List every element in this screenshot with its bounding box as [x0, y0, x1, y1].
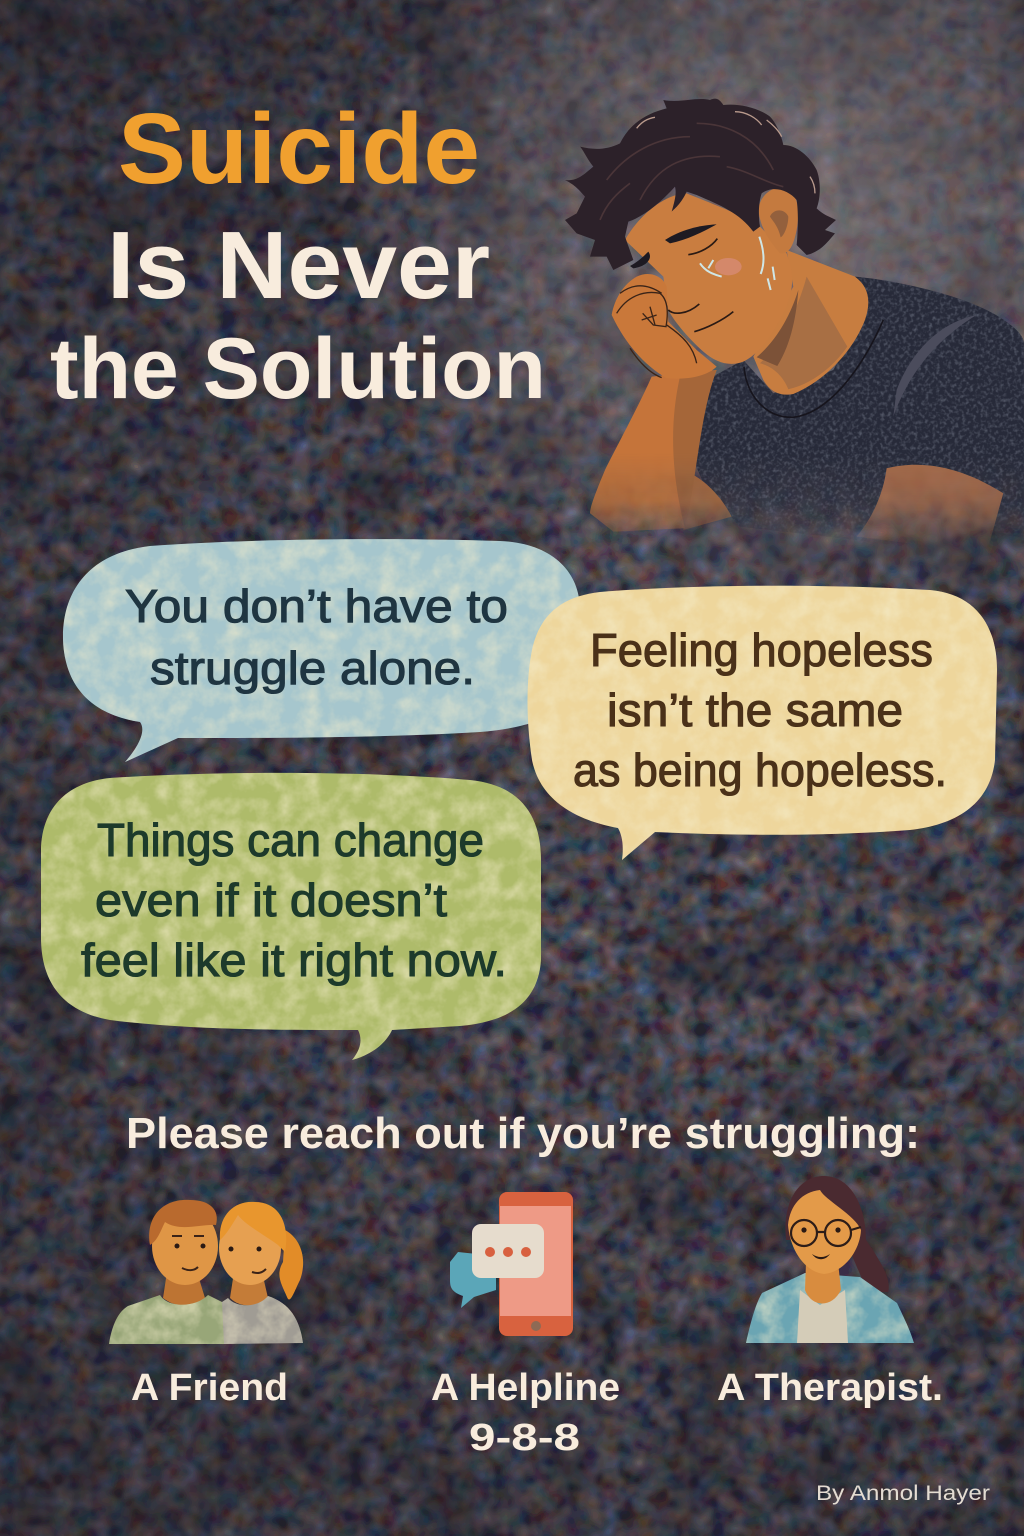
ear inner — [770, 210, 788, 237]
icon: phone with chat bubbles — [450, 1192, 573, 1336]
blue bubble text — [125, 580, 508, 694]
title line: Is Never: Is Never — [107, 212, 490, 319]
phone screen — [500, 1206, 571, 1316]
green bubble text: even if it doesn’t — [95, 874, 447, 926]
therapist eyes and smile — [801, 1227, 841, 1259]
yellow bubble text: Feeling hopeless — [590, 624, 933, 676]
title line: Suicide: Suicide — [118, 93, 480, 205]
credit: By Anmol Hayer — [816, 1482, 990, 1505]
icon: therapist — [746, 1176, 914, 1343]
hand — [612, 274, 717, 379]
yellow bubble text: isn’t the same — [607, 684, 903, 736]
therapist face — [788, 1190, 861, 1274]
speech bubble: yellow — [528, 586, 997, 860]
therapist jacket — [746, 1273, 914, 1343]
yellow bubble text — [573, 624, 947, 796]
nose and mouth — [668, 304, 733, 332]
friend one head — [152, 1207, 218, 1285]
forearm shade — [673, 370, 717, 528]
green bubble shape — [41, 773, 541, 1060]
closed eye — [688, 239, 717, 255]
ear — [758, 188, 798, 254]
second eyebrow — [630, 252, 650, 268]
therapist shirt — [797, 1290, 848, 1343]
shirt — [692, 277, 1024, 560]
label: a therapist: A Therapist. — [717, 1367, 943, 1409]
therapist hair back and braid — [785, 1176, 889, 1292]
call to action heading: Please reach out if you’re struggling: — [126, 1109, 920, 1158]
label: a friend: A Friend — [131, 1367, 288, 1409]
friend two body — [222, 1296, 303, 1344]
speech bubble: green — [41, 773, 541, 1060]
friend two ponytail — [279, 1230, 303, 1299]
green bubble text: Things can change — [97, 814, 484, 866]
friends eyes — [174, 1244, 262, 1252]
resource labels — [131, 1367, 943, 1459]
label: helpline number: 9-8-8 — [469, 1417, 580, 1459]
hair highlights — [637, 112, 815, 193]
face — [625, 193, 792, 364]
neck — [753, 250, 868, 395]
chat dots — [485, 1247, 531, 1257]
cheek blush — [715, 258, 742, 275]
speech bubble: blue — [63, 539, 580, 762]
friend two neck — [230, 1272, 268, 1306]
forearm — [590, 370, 717, 532]
phone body — [499, 1192, 573, 1336]
tears — [700, 237, 775, 290]
lower right forearm — [857, 464, 1004, 542]
title — [50, 93, 546, 417]
hair strands — [600, 123, 783, 220]
neck deep shadow — [757, 290, 798, 366]
green bubble text — [81, 814, 507, 986]
green bubble text: feel like it right now. — [81, 934, 507, 986]
small blue chat bubble — [450, 1252, 496, 1308]
blue bubble shape — [63, 539, 580, 762]
icon: two friends — [109, 1200, 303, 1344]
neck mid shadow — [760, 277, 847, 389]
therapist neck — [805, 1262, 841, 1304]
yellow bubble text: as being hopeless. — [573, 744, 947, 796]
therapist glasses — [791, 1220, 861, 1246]
friend two hair — [220, 1202, 286, 1252]
collar line — [744, 320, 883, 417]
blue bubble text: You don’t have to — [125, 580, 508, 632]
eyebrow — [665, 224, 717, 243]
friend one hair — [149, 1200, 217, 1245]
friend one body — [109, 1295, 224, 1344]
yellow bubble shape — [528, 586, 997, 860]
hand lines — [617, 286, 697, 378]
shirt fold — [893, 315, 977, 417]
label: a helpline: A Helpline — [431, 1367, 620, 1409]
white chat bubble — [472, 1224, 544, 1278]
lower left arm piece — [683, 472, 732, 530]
hair — [565, 99, 836, 270]
phone home button — [531, 1321, 541, 1331]
friend one neck — [163, 1272, 205, 1306]
illustration: crying young man resting head on hand — [565, 99, 1024, 560]
title line: the Solution: the Solution — [50, 321, 546, 417]
friend two head — [219, 1211, 281, 1285]
blue bubble text: struggle alone. — [150, 642, 475, 694]
friends faces — [172, 1236, 266, 1273]
